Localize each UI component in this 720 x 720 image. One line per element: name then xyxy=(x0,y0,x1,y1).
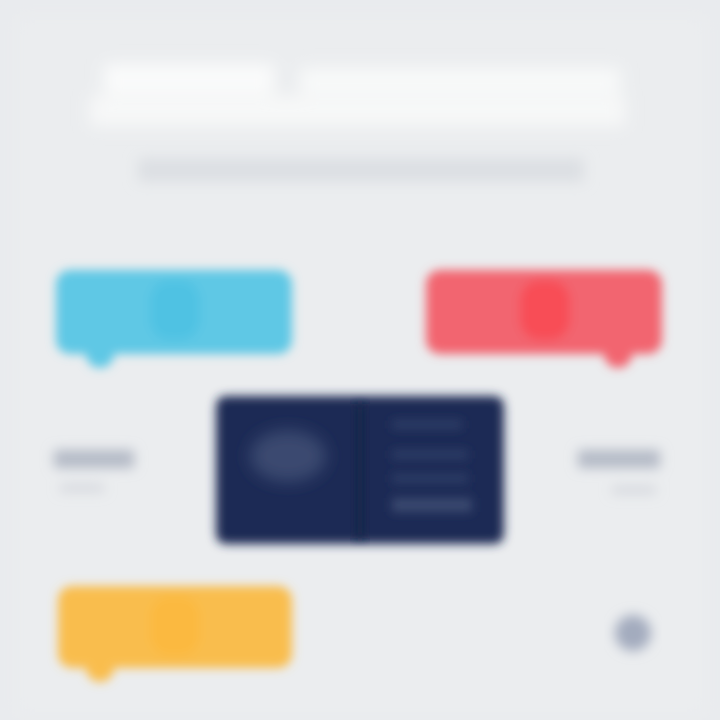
right label xyxy=(578,450,660,494)
callout: yellow xyxy=(58,586,292,682)
left label xyxy=(54,450,134,492)
title xyxy=(90,64,625,126)
panel divider xyxy=(354,404,366,538)
subtitle xyxy=(138,158,584,182)
panel circle graphic xyxy=(250,430,326,482)
callout: blue xyxy=(56,270,292,368)
panel text lines xyxy=(392,420,472,512)
central dark panel xyxy=(216,396,504,544)
callout: red xyxy=(426,270,662,368)
icon: round badge xyxy=(615,615,651,651)
